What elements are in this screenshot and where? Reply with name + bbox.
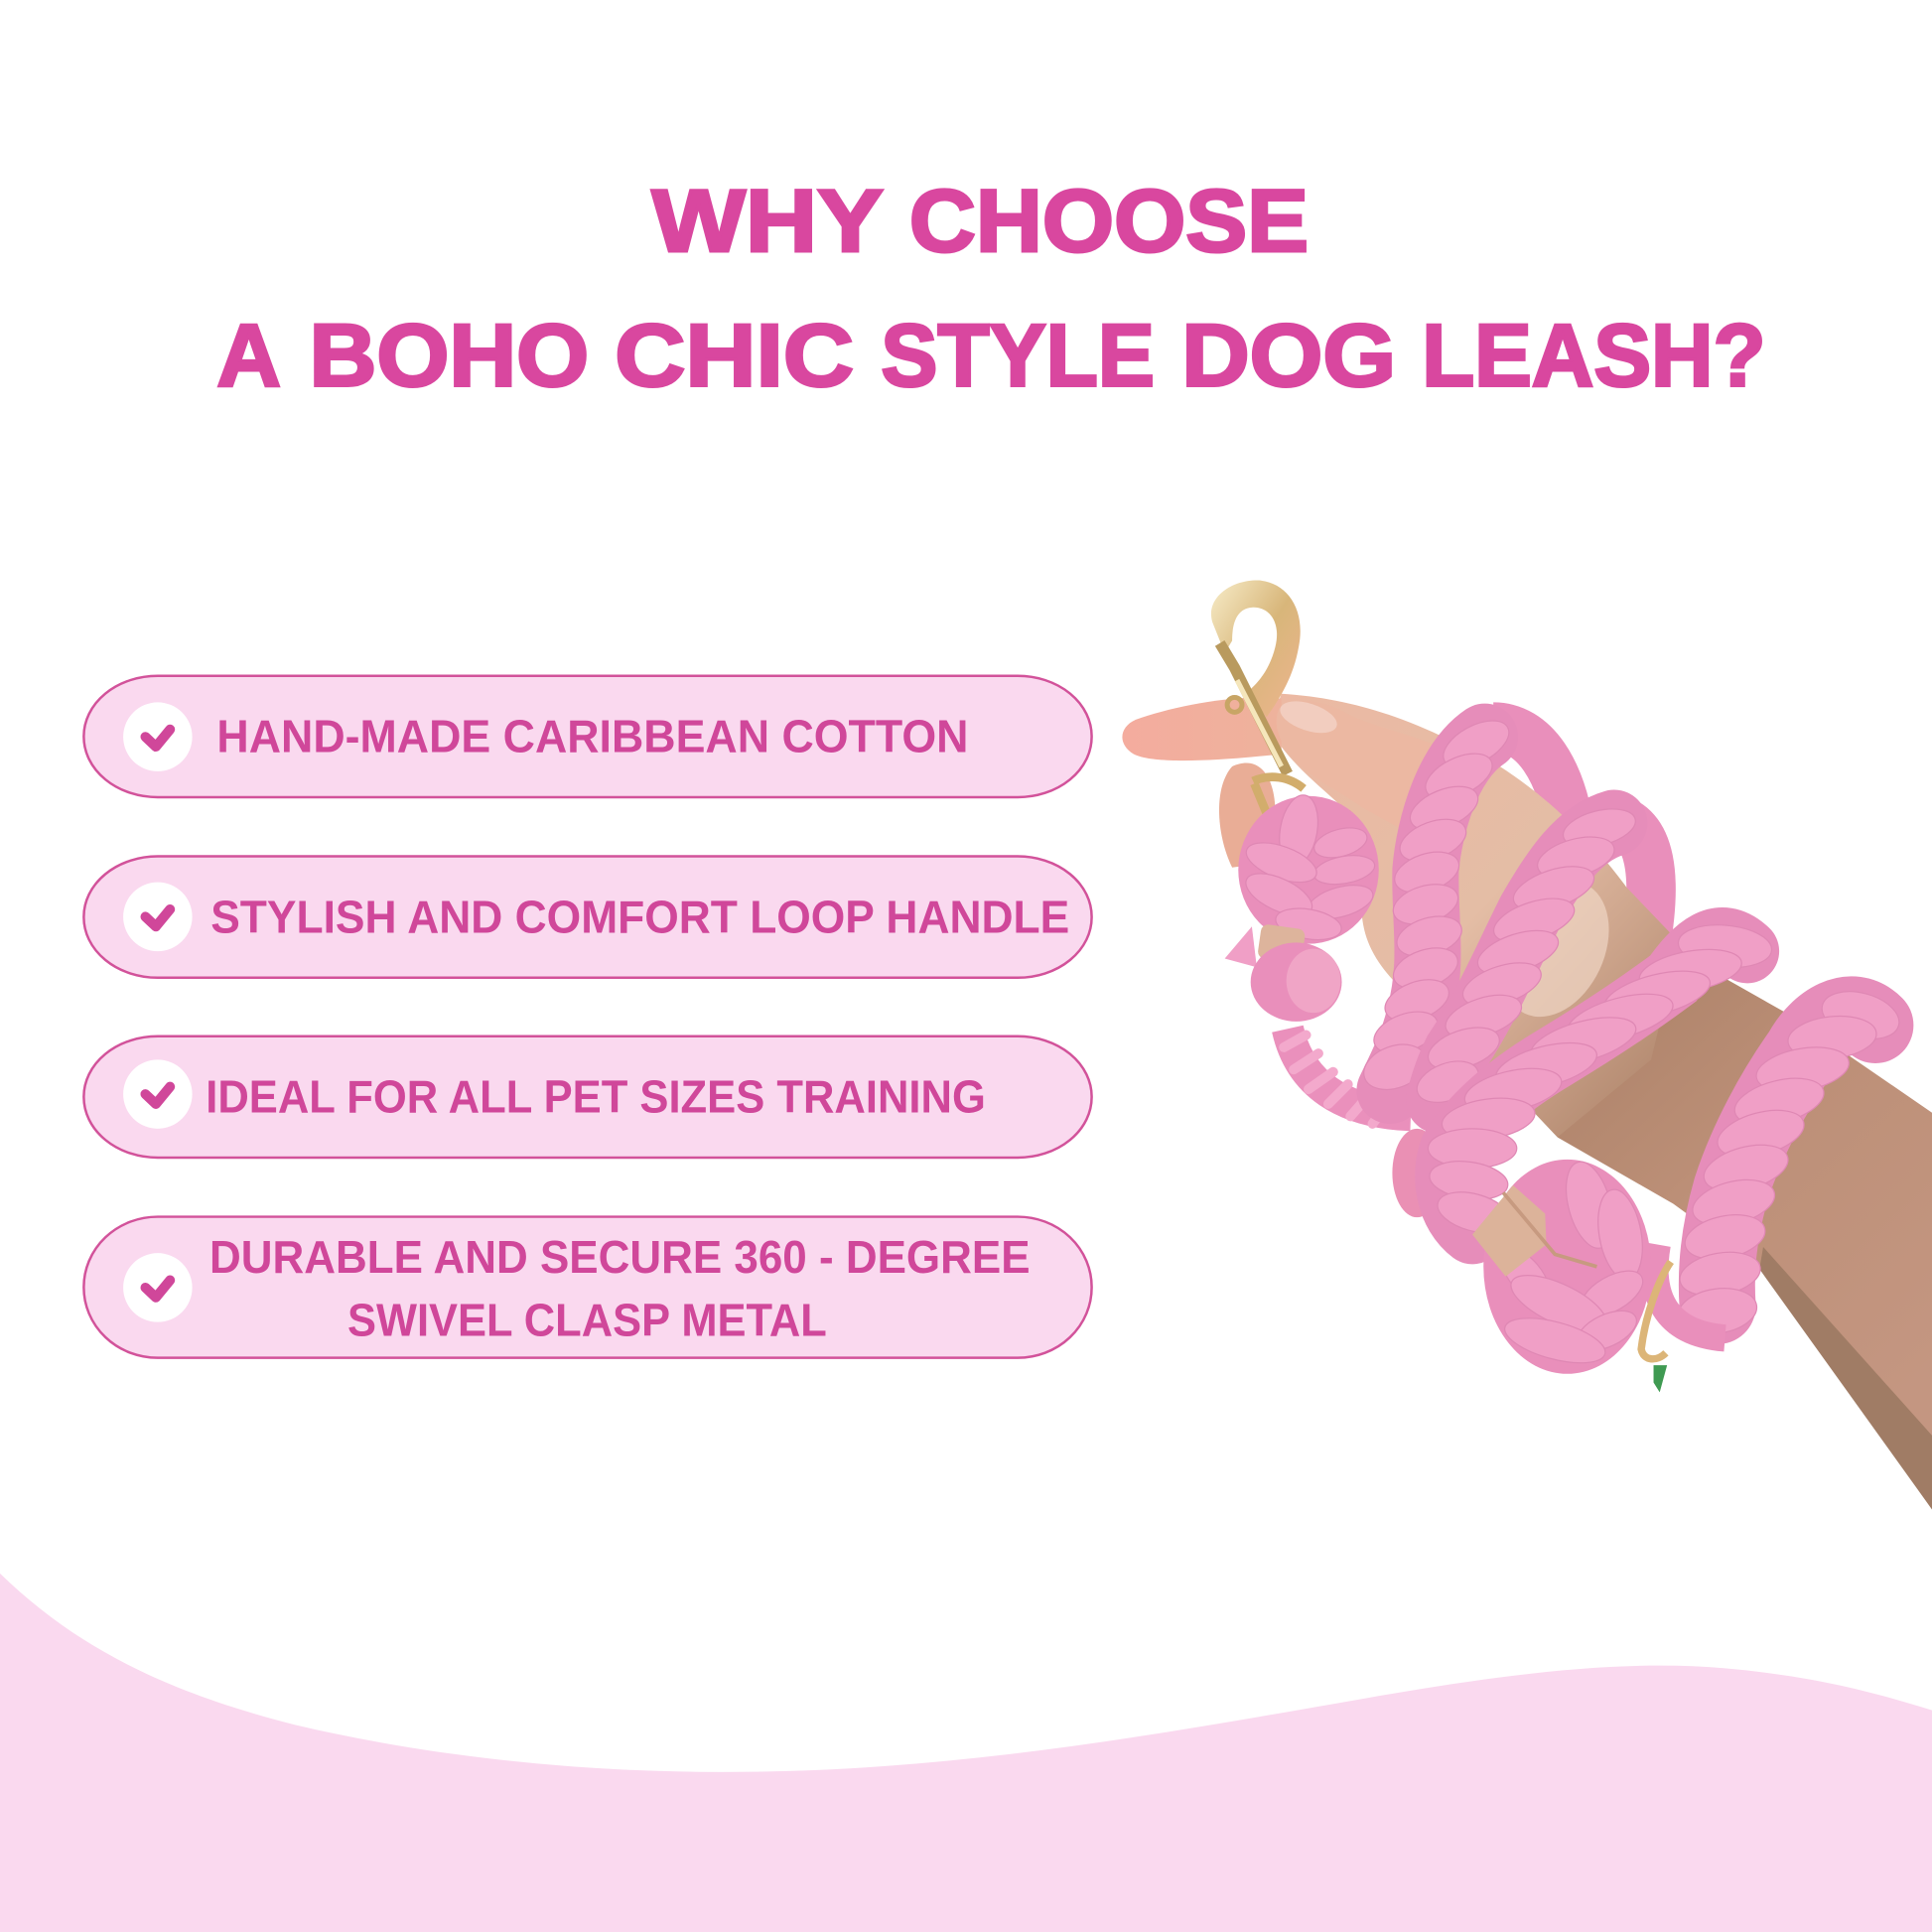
rope strand 2 xyxy=(1412,802,1639,1110)
upper knot xyxy=(1238,792,1379,944)
bottom wave xyxy=(0,1574,1932,1932)
hand and palm xyxy=(1269,694,1680,1138)
forearm xyxy=(1558,936,1932,1509)
rope strand 3 xyxy=(1427,921,1773,1240)
feature 4: DURABLE AND SECURE 360 - DEGREE xyxy=(209,1231,1031,1283)
illustration: hand holding pink rope leash xyxy=(1122,580,1932,1509)
feature 2: STYLISH AND COMFORT LOOP HANDLE xyxy=(210,891,1069,942)
feature 4 xyxy=(83,1217,1092,1358)
title xyxy=(216,171,1765,404)
curled finger xyxy=(1219,762,1276,868)
feature 2 xyxy=(83,857,1092,978)
pom tassel xyxy=(1392,1129,1442,1217)
feature 1 xyxy=(83,676,1092,797)
palm highlight xyxy=(1480,863,1630,1035)
panel: feature list xyxy=(83,676,1092,1358)
title: CHOOSE xyxy=(909,171,1309,270)
upper tassel xyxy=(1225,923,1342,1022)
bottom loop rope xyxy=(1655,1244,1725,1338)
index finger xyxy=(1122,698,1282,760)
thumbnail xyxy=(1276,695,1341,739)
cord wrap xyxy=(1472,1185,1596,1277)
small clasp xyxy=(1641,1262,1671,1392)
rope strand 1 xyxy=(1357,711,1516,1098)
title: WHY xyxy=(652,171,884,270)
arm shadow edge xyxy=(1759,1247,1932,1509)
title: CHIC xyxy=(615,305,854,404)
rope strand 4 xyxy=(1676,984,1904,1338)
feature 4: SWIVEL CLASP METAL xyxy=(347,1294,827,1345)
small rope xyxy=(1284,1029,1411,1124)
feature 1: HAND-MADE CARIBBEAN COTTON xyxy=(216,711,968,762)
title: BOHO xyxy=(310,305,589,404)
title: A xyxy=(216,305,281,404)
feature 3: IDEAL FOR ALL PET SIZES TRAINING xyxy=(206,1071,986,1123)
title: LEASH? xyxy=(1422,305,1765,404)
clasp xyxy=(1211,580,1353,828)
title: DOG xyxy=(1181,305,1396,404)
feature 3 xyxy=(83,1036,1092,1158)
back rope loop 1 xyxy=(1493,727,1571,838)
back rope loop 2 xyxy=(1610,818,1651,949)
title: STYLE xyxy=(881,305,1155,404)
lower knot xyxy=(1483,1157,1651,1374)
thumb xyxy=(1277,701,1448,838)
